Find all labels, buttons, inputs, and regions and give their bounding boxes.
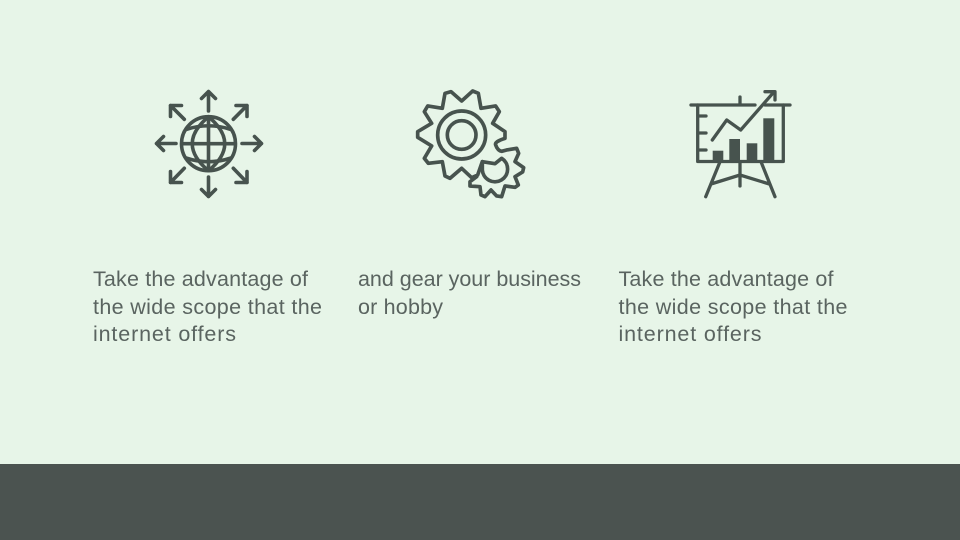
text block: column 1: [93, 267, 322, 346]
text block: column 1: internet offers: [93, 322, 236, 346]
footer band: [0, 464, 960, 540]
text block: column 2: or hobby: [358, 295, 443, 319]
icon: presentation board with chart: [691, 92, 790, 197]
icon: gears: [418, 91, 524, 197]
text block: column 3: the wide scope that the: [618, 295, 848, 319]
text block: column 3: internet offers: [618, 322, 762, 346]
text block: column 2: and gear your business: [358, 267, 581, 291]
text block: column 2: [358, 267, 581, 319]
text block: column 1: Take the advantage of: [93, 267, 308, 291]
text block: column 1: the wide scope that the: [93, 295, 322, 319]
text block: column 3: [618, 267, 848, 346]
text block: column 3: Take the advantage of: [618, 267, 834, 291]
icon: globe with outward arrows: [156, 92, 262, 196]
